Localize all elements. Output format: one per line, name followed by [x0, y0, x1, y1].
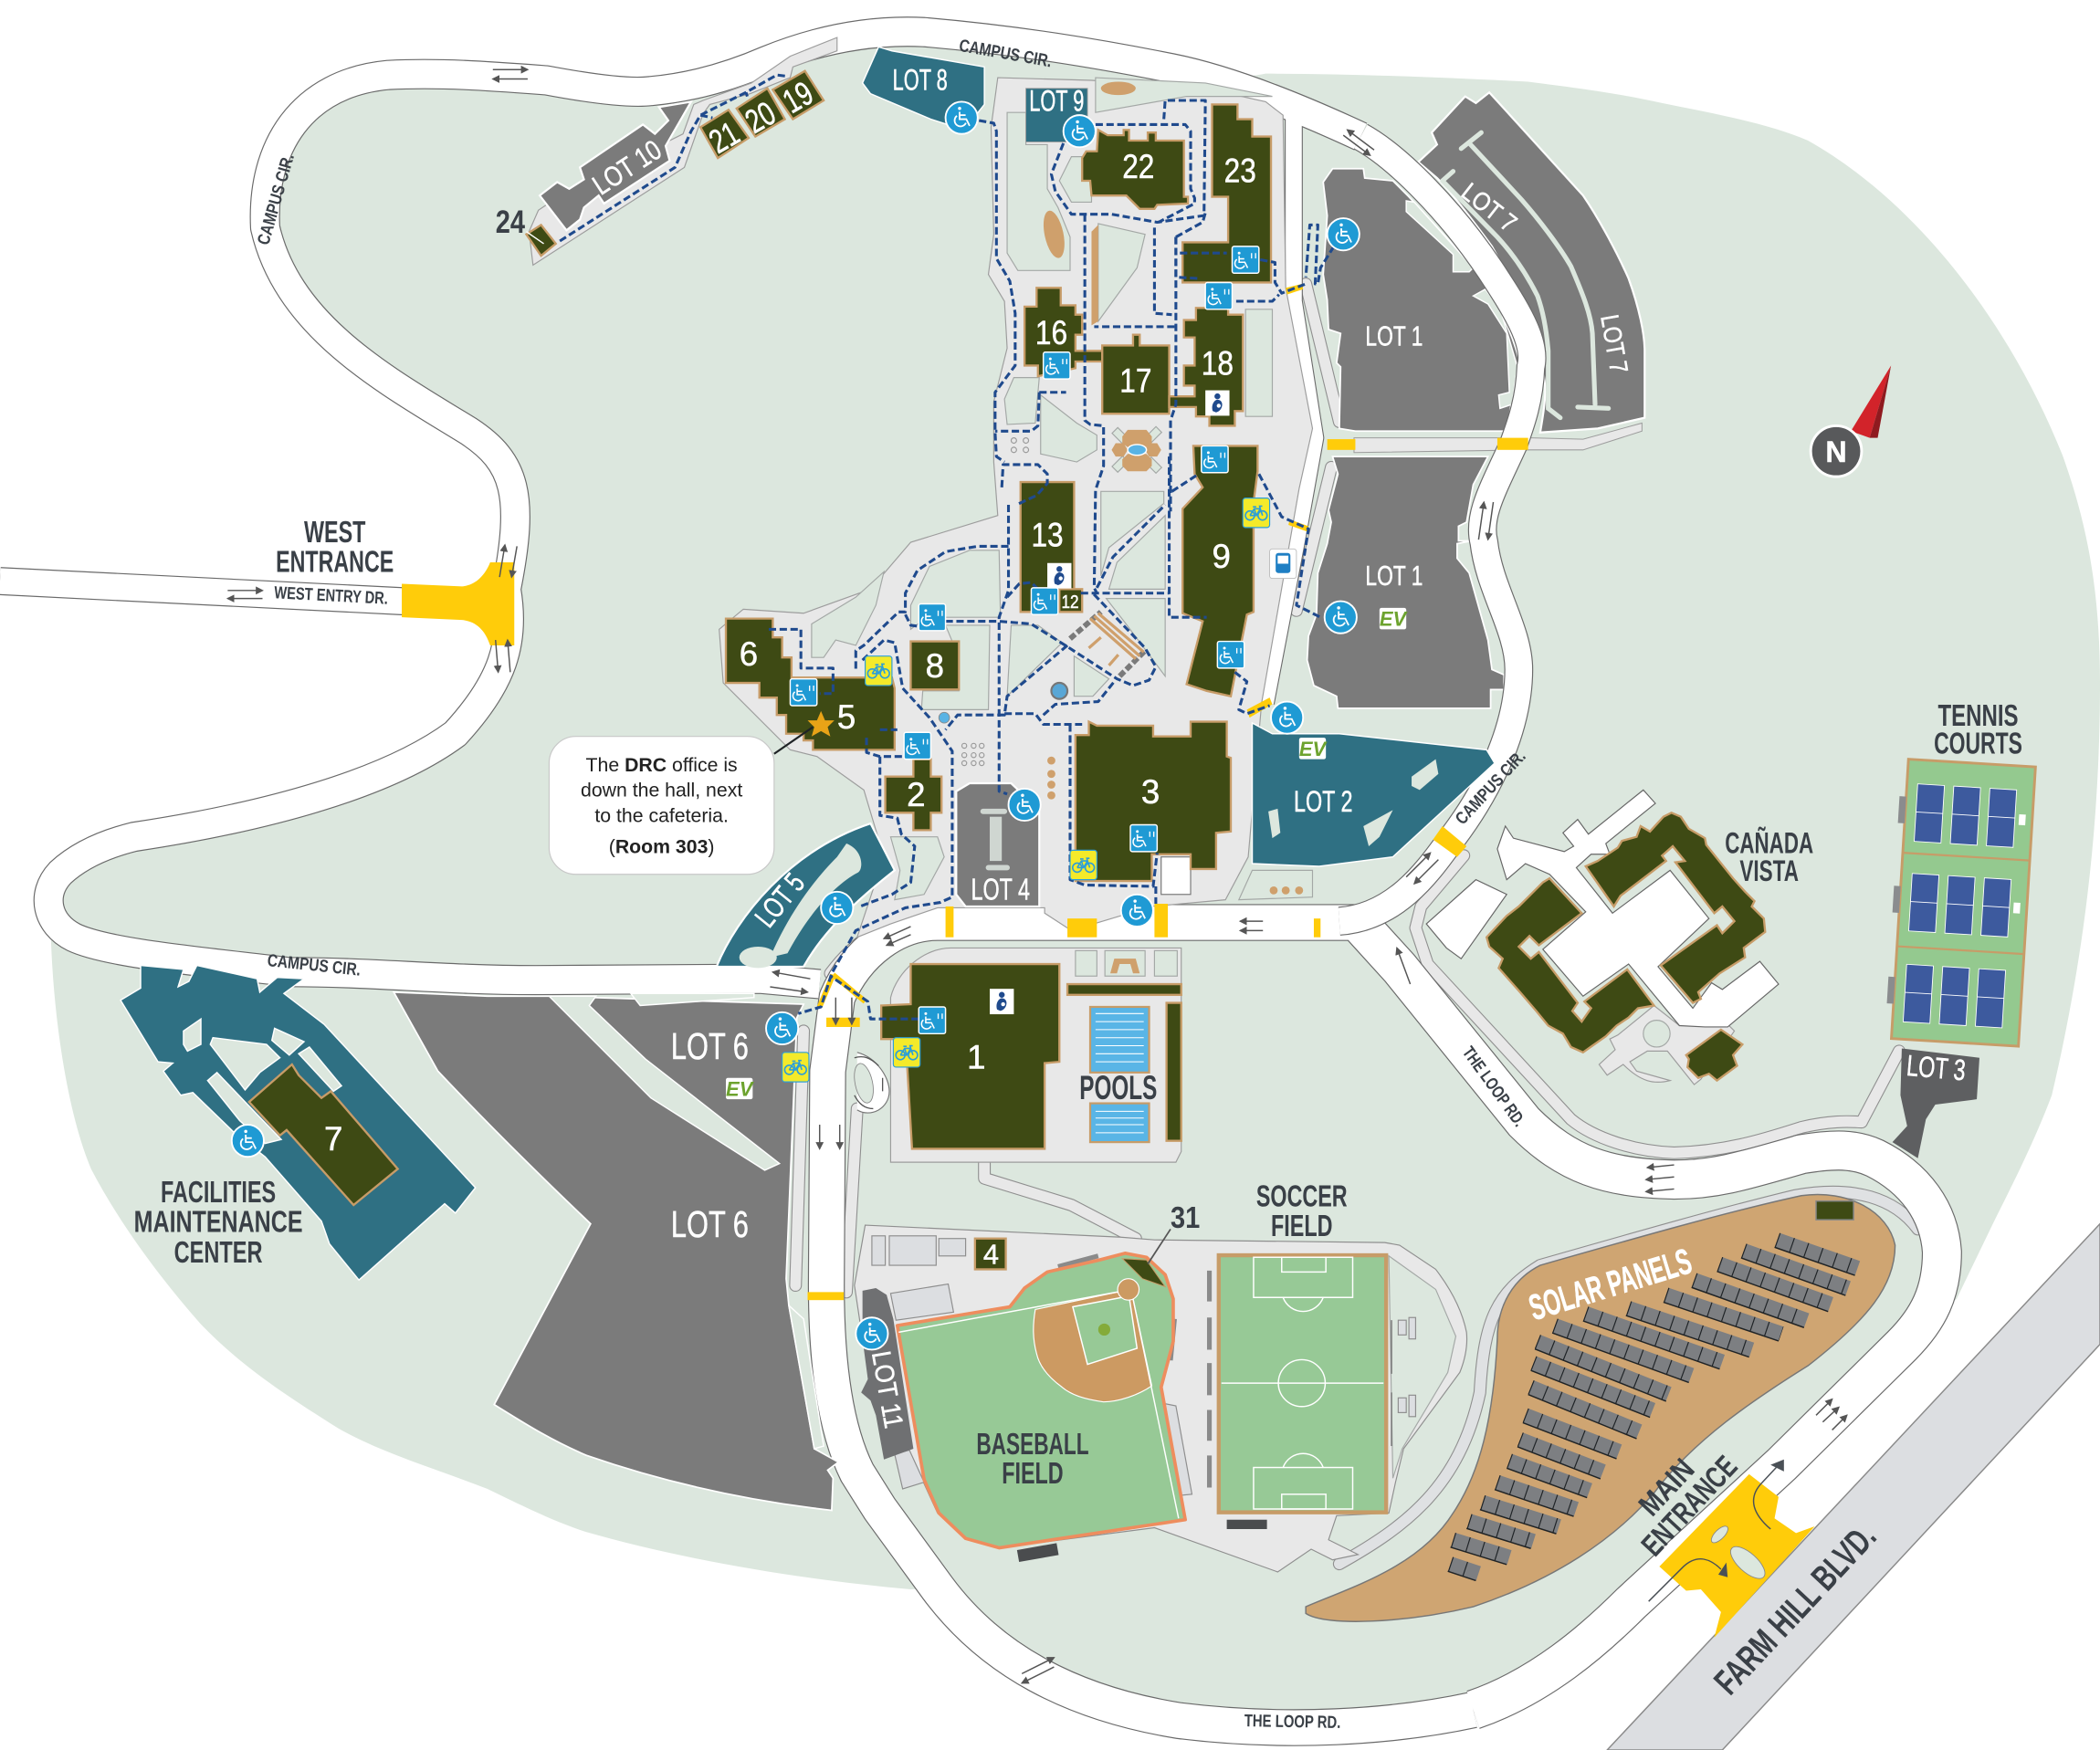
accessible restroom icons — [790, 246, 1259, 1033]
number 9: 9 — [1213, 538, 1231, 575]
callout: The DRC office is — [586, 754, 738, 776]
building numbers — [496, 74, 1256, 1271]
callout: to the cafeteria. — [594, 805, 729, 827]
building 4 — [975, 1239, 1006, 1269]
lot 7 label upper: LOT 7 — [1456, 177, 1522, 237]
number 21: 21 — [703, 114, 746, 161]
tan landscape blobs — [1040, 81, 1303, 895]
walkways along roads — [795, 284, 1918, 1564]
icon: bus stop — [1270, 549, 1297, 579]
facilities maintenance area — [121, 966, 476, 1280]
nursing room icons — [990, 391, 1230, 1014]
lot 3 label: LOT 3 — [1906, 1049, 1967, 1086]
number 19: 19 — [776, 74, 819, 121]
soccer field — [1219, 1179, 1386, 1513]
tennis courts — [1885, 698, 2035, 1046]
tennis label: TENNIS — [1938, 698, 2019, 733]
buildings 21, 20, 19 — [700, 71, 824, 158]
building 7 — [249, 1064, 398, 1205]
building 13 — [1021, 482, 1074, 612]
soccer label line 2: FIELD — [1271, 1209, 1333, 1243]
vista small building — [1686, 1030, 1742, 1081]
building near lot 2 — [1161, 857, 1191, 895]
accessible paths — [560, 75, 1334, 1019]
star: DRC office — [808, 711, 835, 737]
west entrance label: WEST — [304, 515, 366, 550]
number 17: 17 — [1119, 362, 1151, 400]
west entrance label — [276, 515, 394, 579]
main entrance label: MAIN — [1633, 1452, 1701, 1523]
number 1: 1 — [967, 1038, 986, 1075]
number 2: 2 — [907, 776, 926, 813]
lot 11 label: LOT 11 — [866, 1349, 908, 1430]
label 31 with leader: 31 — [1171, 1200, 1200, 1235]
number 6: 6 — [740, 635, 758, 673]
accessible parking icons — [232, 101, 1360, 1349]
number 24: 24 — [496, 204, 525, 240]
lot 7 label lower: LOT 7 — [1595, 312, 1633, 375]
buildings 5 and 6 — [726, 619, 895, 749]
compass north — [1811, 365, 1891, 477]
number 20: 20 — [739, 94, 782, 141]
vista white courtyards — [1497, 790, 1779, 1027]
lot 10 — [529, 37, 837, 265]
pool top — [1090, 1007, 1150, 1073]
building 8 — [910, 642, 959, 689]
baseball field — [898, 1253, 1185, 1548]
callout: down the hall, next — [581, 780, 742, 802]
building 1 — [881, 964, 1059, 1148]
main entrance label: ENTRANCE — [1635, 1450, 1744, 1563]
main entrance junction — [1649, 1460, 1815, 1638]
road labels — [255, 37, 1884, 1733]
facilities maintenance center label: MAINTENANCE — [134, 1204, 303, 1239]
campus cir right: CAMPUS CIR. — [1452, 747, 1530, 829]
soccer label line 1: SOCCER — [1256, 1179, 1348, 1214]
farm hill blvd: FARM HILL BLVD. — [1706, 1516, 1884, 1703]
number 16: 16 — [1035, 314, 1067, 351]
building 22 — [1082, 130, 1188, 209]
lot 1 label: LOT 1 — [1365, 320, 1423, 351]
building 24 with pin — [526, 225, 556, 256]
campus core sidewalks — [719, 78, 1313, 938]
callout: (Room 303) — [609, 835, 714, 857]
baseball label line 2: FIELD — [1002, 1456, 1064, 1491]
lot 6 — [394, 992, 838, 1510]
lot 10 label: LOT 10 — [587, 133, 667, 201]
road arrows — [227, 69, 1847, 1683]
strip between lots — [1354, 423, 1642, 453]
baseball label line 1: BASEBALL — [976, 1427, 1089, 1462]
building 12 — [1059, 589, 1082, 612]
sports complex grounds — [855, 1225, 1467, 1572]
plaza details — [939, 438, 1145, 766]
number 3: 3 — [1141, 773, 1160, 811]
compass north: N — [1825, 435, 1847, 468]
lot 8 label: LOT 8 — [893, 63, 948, 96]
campus cir bottom left: CAMPUS CIR. — [267, 951, 362, 980]
lawns in campus core — [812, 78, 1313, 900]
lot 2 — [1252, 723, 1495, 866]
building 9 — [1182, 445, 1257, 697]
solar arrays — [1448, 1240, 1858, 1580]
pools and building 1 grounds — [890, 948, 1181, 1162]
vista plaza walkways — [1599, 1006, 1735, 1085]
campus cir left: CAMPUS CIR. — [255, 152, 299, 247]
west entry dr: WEST ENTRY DR. — [274, 583, 388, 609]
number 18: 18 — [1202, 345, 1234, 382]
lot 3 — [1893, 1048, 1979, 1158]
EV charging icons — [726, 608, 1409, 1101]
number 12: 12 — [1061, 592, 1079, 613]
lot 4 — [956, 783, 1039, 907]
courts label: COURTS — [1934, 727, 2022, 761]
canada label: CAÑADA — [1725, 826, 1813, 859]
building 18 — [1170, 308, 1243, 425]
lot 6 lower label: LOT 6 — [671, 1203, 749, 1245]
lot 7 — [1418, 92, 1644, 433]
road: Farm Hill Blvd — [1607, 1224, 2100, 1750]
campus cir top: CAMPUS CIR. — [958, 37, 1053, 71]
lot 5 label: LOT 5 — [749, 867, 811, 933]
lot 6 upper label: LOT 6 — [671, 1025, 749, 1067]
number 7: 7 — [324, 1120, 342, 1158]
vista buildings north — [1586, 812, 1765, 1003]
canada vista — [1426, 790, 1813, 1085]
lot 9 label: LOT 9 — [1029, 85, 1084, 118]
lot 1 lower label: LOT 1 — [1365, 560, 1423, 592]
number 13: 13 — [1031, 516, 1064, 553]
lot 5 — [717, 823, 895, 968]
buildings — [526, 71, 1271, 1269]
lot 1 upper — [1323, 169, 1518, 431]
vista label: VISTA — [1739, 854, 1799, 887]
number 8: 8 — [926, 647, 944, 685]
building 2 — [886, 760, 941, 830]
solar panels — [1306, 1194, 1895, 1621]
the loop rd upper: THE LOOP RD. — [1458, 1043, 1528, 1130]
pools label: POOLS — [1079, 1069, 1157, 1106]
the loop rd lower: THE LOOP RD. — [1244, 1712, 1341, 1733]
number 23: 23 — [1224, 152, 1256, 189]
building 23 — [1182, 104, 1271, 282]
facilities maintenance center label: FACILITIES — [161, 1175, 276, 1210]
bike parking icons — [782, 498, 1270, 1082]
main entrance label — [1633, 1450, 1744, 1563]
lot 1 lower — [1307, 456, 1504, 708]
west entrance label: ENTRANCE — [276, 544, 394, 579]
solar label: SOLAR PANELS — [1525, 1242, 1696, 1328]
road: Campus Circle east side — [1339, 137, 1532, 921]
number 5: 5 — [837, 698, 856, 736]
crosswalks — [402, 284, 1528, 1300]
roundabout — [851, 1053, 889, 1113]
pool bottom — [1090, 1104, 1150, 1142]
lot 2 label: LOT 2 — [1294, 785, 1353, 818]
facilities maintenance center label: CENTER — [174, 1235, 263, 1270]
number 4: 4 — [983, 1239, 999, 1271]
facilities maintenance center label — [134, 1175, 303, 1270]
number 22: 22 — [1122, 148, 1154, 185]
lot 11 — [861, 1288, 913, 1460]
vista buildings south — [1486, 878, 1654, 1053]
solar building — [1816, 1201, 1853, 1220]
callout — [549, 727, 813, 875]
lot 8 — [863, 47, 984, 130]
building 17 — [1102, 335, 1170, 414]
lot 9 — [1026, 85, 1087, 141]
lot 4 label: LOT 4 — [971, 873, 1030, 907]
building 16 — [1024, 288, 1102, 376]
label 31 with leader — [1148, 1200, 1200, 1264]
building 3 — [1076, 722, 1231, 881]
